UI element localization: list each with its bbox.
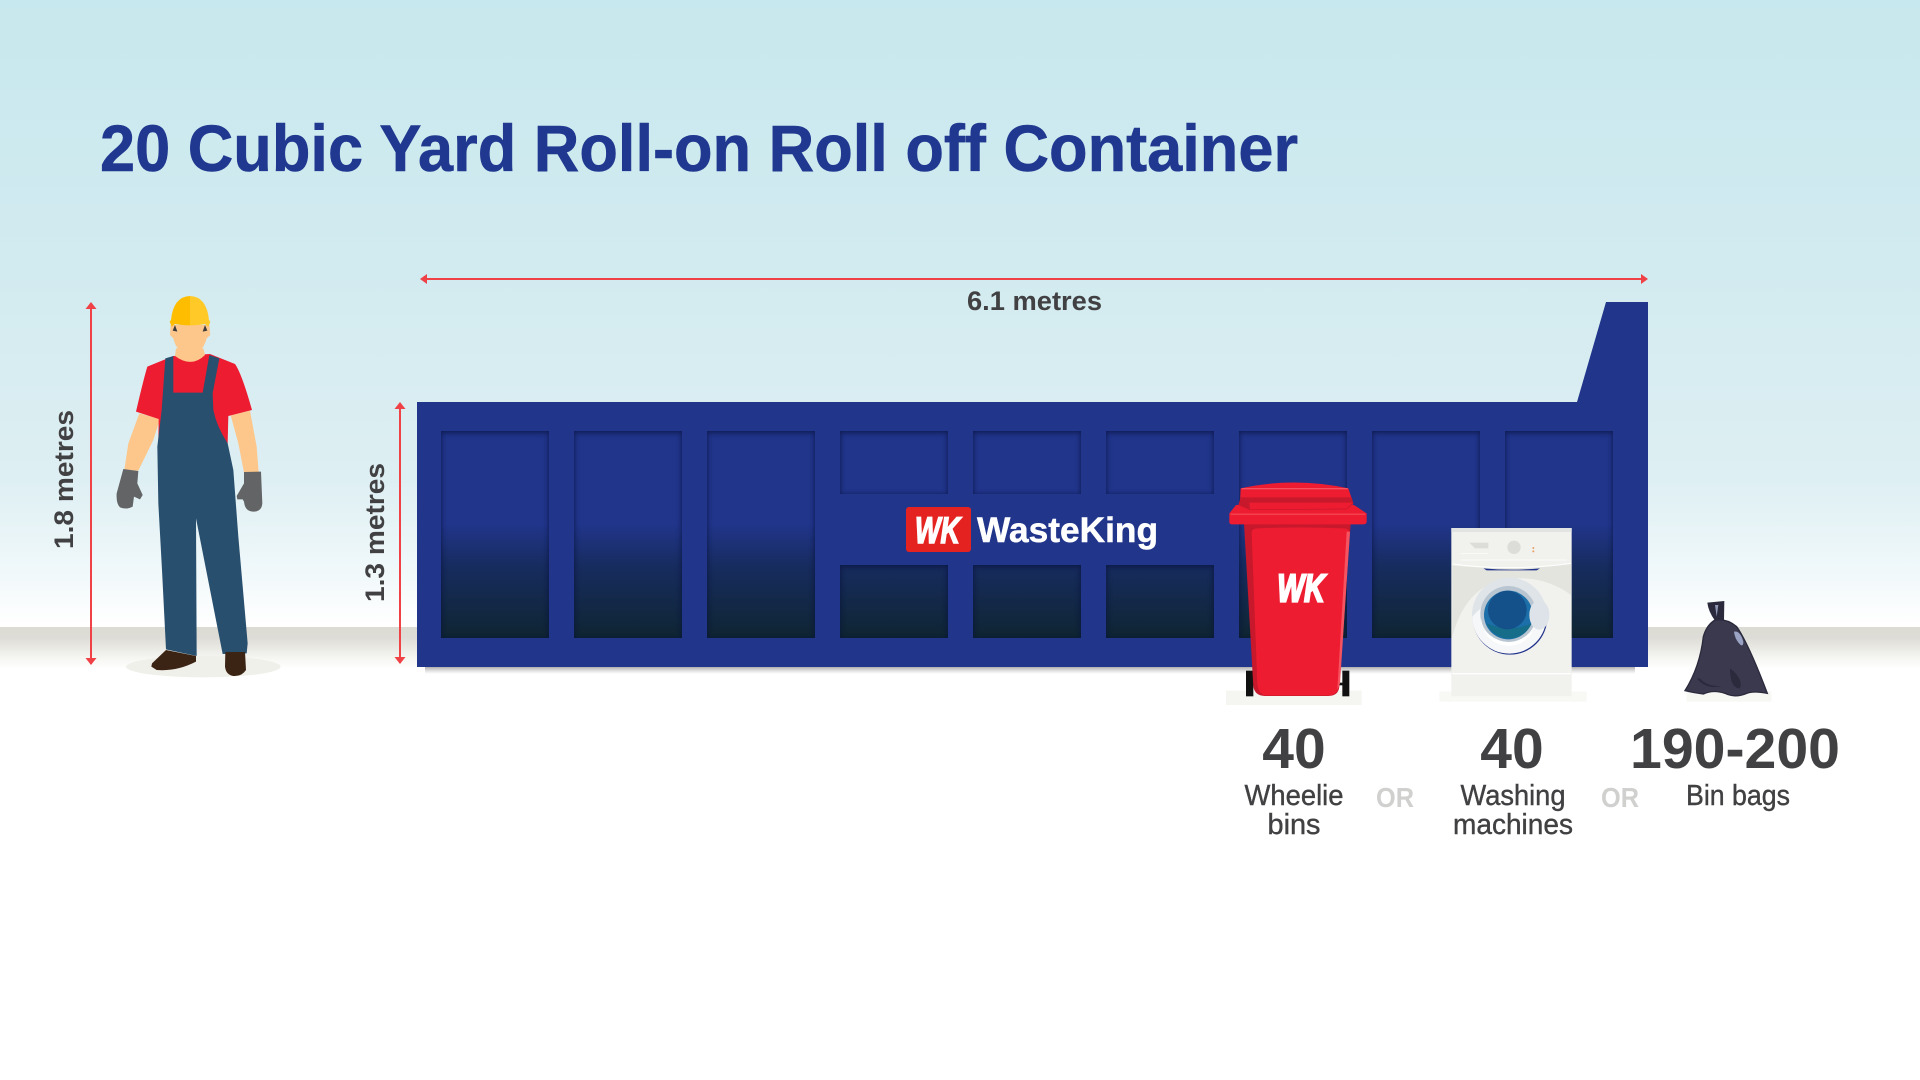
stat: 190-200 bin bags: 190-200 — [1630, 717, 1840, 781]
stat: 40 washing machines: machines — [1453, 809, 1573, 841]
stat: 40 wheelie bins: Wheelie — [1244, 780, 1344, 812]
label: 1.3 metres: 1.3 metres — [360, 463, 390, 602]
stat: 190-200 bin bags: Bin bags — [1686, 780, 1790, 812]
arrow: person height — [86, 302, 96, 665]
logo: WasteKing — [906, 507, 1158, 552]
arrow: container length — [420, 274, 1648, 284]
separator: OR: OR — [1376, 782, 1414, 813]
icon: red wheelie bin: WK — [1277, 566, 1327, 610]
label: 1.8 metres: 1.8 metres — [49, 410, 79, 549]
stat: 40 washing machines: 40 — [1480, 717, 1544, 781]
title: 20 Cubic Yard Roll-on Roll off Container — [100, 111, 1298, 185]
arrow: container height — [394, 402, 406, 664]
label: 6.1 metres: 6.1 metres — [967, 286, 1102, 316]
ground strip — [0, 627, 1920, 669]
logo: WasteKing: WK — [915, 510, 962, 551]
stat: 40 wheelie bins — [1244, 717, 1344, 841]
icon: washing machine — [1439, 528, 1587, 702]
background: sky and ground — [0, 0, 1920, 680]
stat: 40 wheelie bins: bins — [1268, 809, 1320, 841]
icon: red wheelie bin — [1226, 482, 1367, 705]
container panels — [441, 431, 1613, 638]
logo: WasteKing: WasteKing — [977, 511, 1158, 550]
panel: roll-on roll-off container — [417, 302, 1648, 673]
stat: 190-200 bin bags — [1630, 717, 1840, 812]
icon: bin bag — [1685, 601, 1771, 702]
separator: OR: OR — [1601, 782, 1639, 813]
container body — [417, 302, 1648, 673]
figure: worker — [117, 296, 281, 677]
stat: 40 wheelie bins: 40 — [1262, 717, 1326, 781]
stat: 40 washing machines — [1453, 717, 1573, 841]
stat: 40 washing machines: Washing — [1460, 780, 1566, 812]
